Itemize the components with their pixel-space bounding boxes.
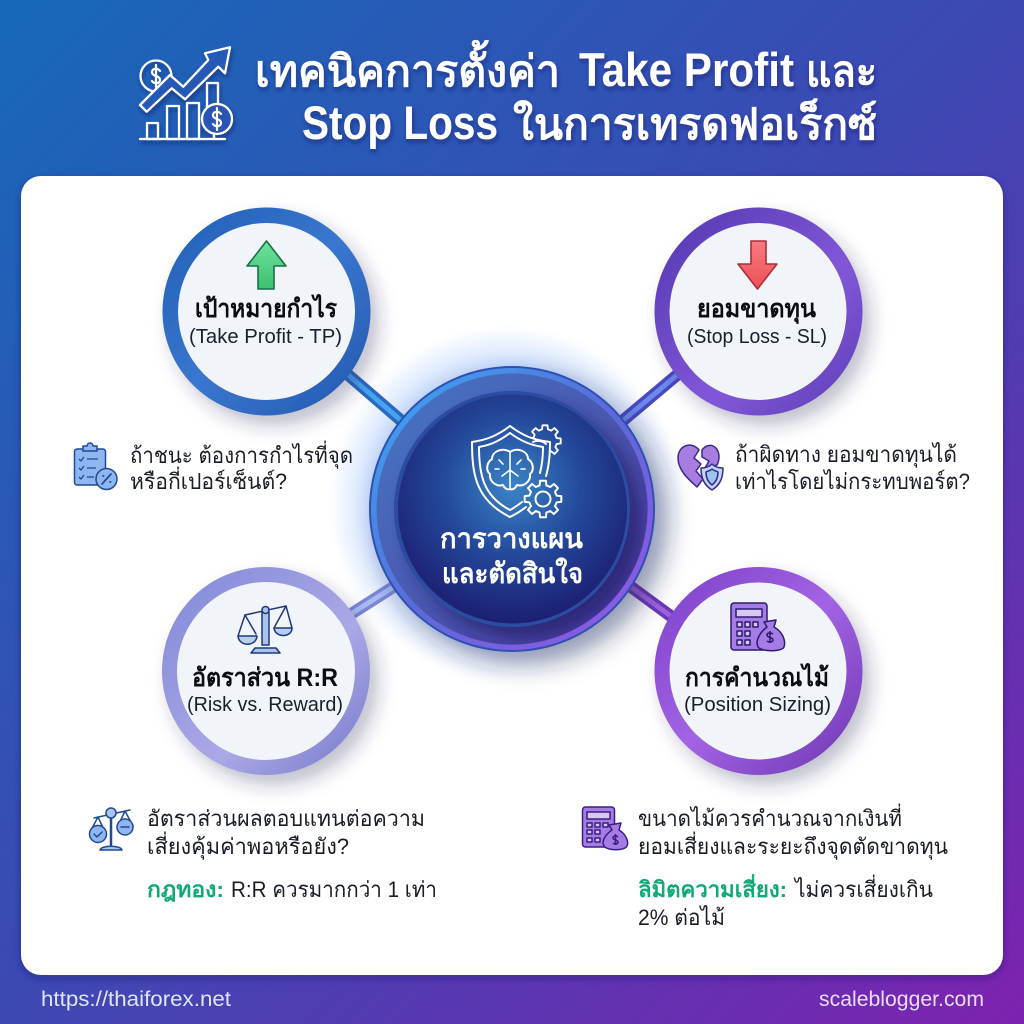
center glow — [328, 325, 684, 681]
take profit question — [130, 440, 353, 494]
panel: position sizing node — [654, 567, 862, 775]
icon: red down arrow — [738, 241, 777, 289]
golden rule: R:R ควรมากกว่า 1 เท่า — [231, 877, 437, 902]
take profit heading: เป้าหมายกำไร — [195, 293, 338, 323]
icon: shield with brain and gears — [472, 425, 561, 517]
position sizing description — [638, 803, 948, 860]
title: Take Profit — [579, 43, 794, 96]
risk reward question: อัตราส่วนผลตอบแทนต่อความ — [147, 806, 425, 831]
take profit subtitle: (Take Profit - TP) — [189, 326, 342, 348]
panel: central hub — [369, 366, 655, 652]
connector: take profit — [346, 373, 404, 423]
risk reward subtitle: (Risk vs. Reward) — [187, 694, 343, 716]
risk reward question: เสี่ยงคุ้มค่าพอหรือยัง? — [147, 831, 349, 860]
icon: calculator and money bag — [731, 603, 785, 651]
panel: position sizing note — [582, 803, 948, 930]
title: Stop Loss — [302, 96, 498, 149]
risk reward heading: อัตราส่วน R:R — [192, 664, 338, 692]
stop loss question — [735, 442, 970, 494]
risk limit: ไม่ควรเสี่ยงเกิน — [793, 874, 933, 902]
panel: risk reward note — [90, 806, 437, 902]
risk limit: 2% ต่อไม้ — [638, 905, 725, 930]
icon: clipboard with percent — [74, 443, 117, 490]
position sizing description: ยอมเสี่ยงและระยะถึงจุดตัดขาดทุน — [638, 831, 948, 860]
take profit question: ถ้าชนะ ต้องการกำไรที่จุด — [130, 440, 353, 469]
golden rule: กฎทอง: — [147, 877, 224, 902]
title: ในการเทรดฟอเร็กซ์ — [513, 98, 877, 149]
hub label: การวางแผน — [440, 523, 583, 554]
stop loss subtitle: (Stop Loss - SL) — [687, 326, 827, 348]
hub label — [440, 523, 583, 589]
panel: take profit node — [162, 208, 370, 416]
hub label: และตัดสินใจ — [442, 557, 583, 589]
risk reward question — [147, 806, 425, 860]
position sizing subtitle: (Position Sizing) — [684, 694, 831, 716]
risk limit: ลิมิตความเสี่ยง: — [638, 873, 787, 902]
icon: small calculator and bag — [582, 807, 628, 850]
title: เทคนิคการตั้งค่า — [255, 39, 560, 96]
stop loss heading: ยอมขาดทุน — [697, 295, 816, 325]
icon: balance scale — [238, 606, 292, 653]
take profit question: หรือกี่เปอร์เซ็นต์? — [130, 466, 287, 494]
icon: growth chart with coins — [140, 47, 232, 139]
icon: broken heart and shield — [678, 445, 723, 490]
golden rule — [147, 877, 437, 902]
footer: right url: scaleblogger.com — [819, 988, 984, 1011]
connector: position sizing — [627, 584, 672, 617]
stop loss question: ถ้าผิดทาง ยอมขาดทุนได้ — [735, 442, 957, 468]
panel: risk reward node — [162, 567, 370, 775]
connectors — [346, 373, 677, 617]
icon: balance with check marks — [90, 808, 133, 850]
panel: stop loss node — [654, 208, 862, 416]
title: และ — [806, 48, 877, 96]
risk limit — [638, 873, 933, 930]
stop loss question: เท่าไรโดยไม่กระทบพอร์ต? — [735, 469, 970, 494]
icon: green up arrow — [247, 241, 286, 289]
connector: stop loss — [620, 375, 677, 423]
position sizing heading: การคำนวณไม้ — [685, 662, 829, 692]
position sizing description: ขนาดไม้ควรคำนวณจากเงินที่ — [638, 803, 902, 831]
connector: risk reward — [351, 584, 398, 614]
title — [255, 39, 877, 149]
footer: left url: https://thaiforex.net — [41, 988, 231, 1011]
panel: white card — [21, 176, 1003, 975]
panel: take profit note — [74, 440, 353, 494]
panel: stop loss note — [678, 442, 970, 494]
